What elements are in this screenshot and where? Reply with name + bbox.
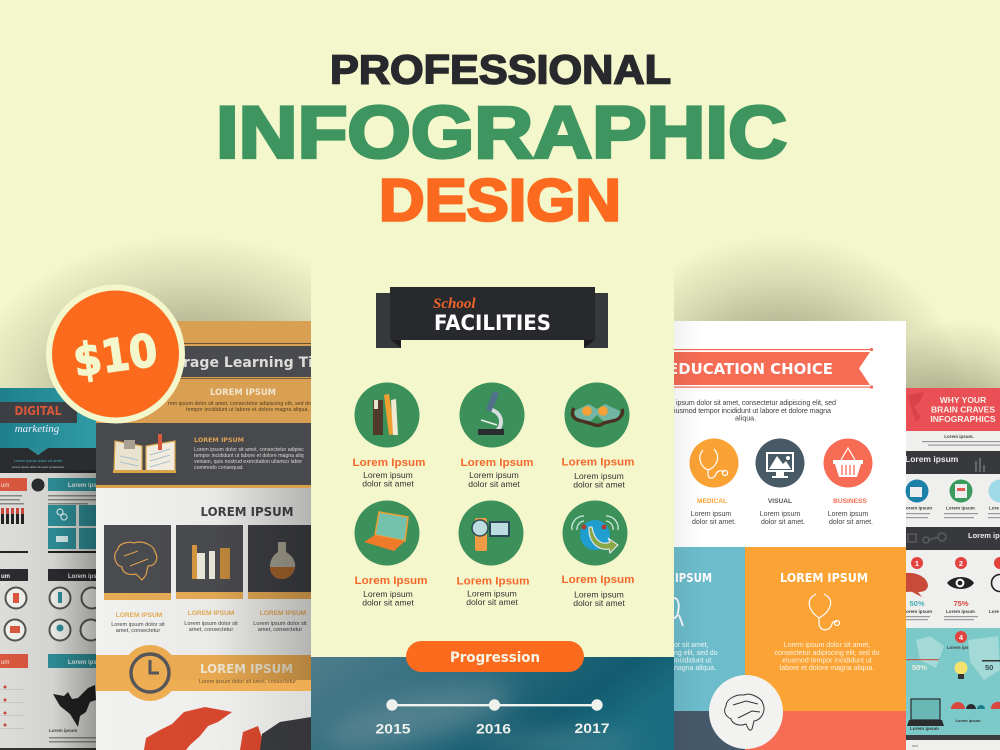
card captions: Lorem ipsum dolor sit <box>111 622 165 628</box>
icon: books <box>354 382 420 448</box>
icon row captions: Lorem ipsum <box>946 506 975 510</box>
facility labels: dolor sit amet <box>362 598 414 608</box>
panel: digital marketing (far left): um <box>1 660 9 666</box>
card captions: LOREM IPSUM <box>188 610 235 617</box>
icon: light bulb <box>954 662 968 679</box>
icon rings <box>4 588 102 640</box>
background shadow <box>0 235 1000 580</box>
orange block: Lorem ipsum dolor sit amet, <box>784 642 870 649</box>
stat captions <box>906 609 999 620</box>
blue block: incididunt ut <box>674 658 711 664</box>
card captions: LOREM IPSUM <box>260 610 307 617</box>
book row text: veniam, quis nostrud exercitation ullamco labor <box>194 459 302 465</box>
panel: why your brain craves infographics <box>905 388 1000 750</box>
card: books <box>176 525 243 599</box>
people row <box>1 508 24 514</box>
facility labels: dolor sit amet <box>466 597 518 607</box>
facility labels: dolor sit amet <box>573 480 625 490</box>
icon labels: dolor sit amet. <box>761 519 805 526</box>
teal header <box>0 388 96 448</box>
icon: laptop <box>354 500 420 566</box>
teal map block: 50% <box>912 663 927 672</box>
icon labels <box>691 498 873 526</box>
map blob <box>908 392 924 422</box>
panel: digital marketing (far left): um <box>1 574 10 580</box>
cart dot <box>32 478 44 492</box>
dark strip <box>0 448 96 473</box>
facility labels: Lorem Ipsum <box>460 457 534 469</box>
timeline: 2017 <box>574 720 610 736</box>
panel: average learning time: tempor incididunt ut labore et dolore magna aliqua. <box>186 407 309 413</box>
teal map block <box>906 628 1000 735</box>
timeline: 2016 <box>476 720 511 736</box>
panel: digital marketing (far left) <box>0 388 102 750</box>
header title: INFOGRAPHICS <box>930 414 996 424</box>
map silhouette <box>53 685 96 727</box>
world map <box>144 707 311 750</box>
bottom colour blocks <box>674 711 745 750</box>
price badge <box>46 284 185 424</box>
sky footer <box>311 657 674 750</box>
red header <box>906 388 1000 431</box>
right edge shade <box>0 470 96 750</box>
heading: professional infographic design <box>216 46 787 234</box>
digital heading: DIGITAL <box>14 404 62 418</box>
icon: laptop <box>907 699 944 726</box>
heading line: INFOGRAPHIC: INFOGRAPHIC <box>216 92 787 174</box>
orange clock band <box>96 655 311 691</box>
sky clouds <box>328 676 632 750</box>
panel: digital marketing (far left): um <box>1 483 9 489</box>
facility labels: Lorem ipsum <box>467 588 517 598</box>
facility labels: Lorem Ipsum <box>352 457 426 469</box>
stats: 75% <box>953 599 969 608</box>
stats <box>909 599 969 608</box>
icon labels: Lorem ipsum <box>828 511 868 518</box>
card: flask <box>248 525 311 599</box>
intro text: ipsum dolor sit amet, consectetur adipiscing elit, sed <box>676 398 836 407</box>
intro text: aliqua. <box>735 414 756 422</box>
facility labels: Lorem ipsum <box>574 590 624 600</box>
slider rows <box>0 689 24 729</box>
banner script: School <box>433 296 476 312</box>
numbered badges <box>911 557 1000 569</box>
dark band two <box>906 527 1000 550</box>
section heading: LOREM IPSUM <box>200 504 294 519</box>
dark band <box>906 451 1000 474</box>
icon: goggles <box>564 382 630 448</box>
heading line: DESIGN: DESIGN <box>379 168 621 234</box>
card captions: amet, consectetur <box>116 628 160 634</box>
stat captions: Lore <box>989 609 999 614</box>
orange top band <box>96 321 311 423</box>
panel: why your brain craves infographics: 30% <box>912 744 918 748</box>
facility labels: Lorem Ipsum <box>562 456 635 468</box>
intro text <box>674 398 836 422</box>
panel: digital marketing (far left): Lorem ipsum dolor sit amet <box>14 458 63 463</box>
red tab <box>0 478 27 491</box>
icon row <box>906 480 1000 502</box>
icon labels: MEDICAL <box>697 498 727 505</box>
dark book row <box>96 423 311 485</box>
numbered badges: 1 <box>915 559 919 568</box>
teal tab 2 <box>48 654 96 668</box>
card captions <box>111 610 307 634</box>
dark ribbon <box>0 402 77 423</box>
blue block: IPSUM <box>675 571 712 585</box>
icon: brain <box>906 573 928 597</box>
stats: 50% <box>909 599 925 608</box>
ribbon <box>668 348 873 389</box>
icon labels: VISUAL <box>768 498 792 505</box>
icon labels: dolor sit amet. <box>692 519 736 526</box>
dark band two title: Lorem ip <box>968 531 1000 540</box>
blue block: or sit amet, <box>674 642 709 649</box>
icon: clock <box>122 645 178 701</box>
facility labels: dolor sit amet <box>573 598 625 608</box>
panel: education choice <box>668 321 906 750</box>
icon: eye <box>947 577 974 589</box>
mini gauges <box>951 702 1000 709</box>
panel: digital marketing (far left): Lorem ips <box>68 574 97 580</box>
facility labels: dolor sit amet <box>362 478 414 488</box>
header title <box>930 395 996 424</box>
header title: BRAIN CRAVES <box>931 404 995 414</box>
facility labels <box>352 456 635 608</box>
dark band title: Lorem ipsum <box>905 454 959 464</box>
icon labels: BUSINESS <box>833 498 867 505</box>
separators <box>0 551 28 553</box>
timeline <box>376 699 610 736</box>
facility labels: Lorem ipsum <box>363 589 413 599</box>
numbered badges: 2 <box>959 559 963 568</box>
progression pill <box>406 641 584 672</box>
dark footer band <box>906 735 1000 740</box>
facility labels: Lorem Ipsum <box>562 574 635 586</box>
panel: average learning time <box>96 321 313 750</box>
card captions: amet, consectetur <box>258 627 302 633</box>
title banner <box>376 287 608 348</box>
intro text: iusmod tempor incididunt ut labore et dolore magna <box>674 406 831 415</box>
blue block: nagna aliqua. <box>674 665 716 672</box>
card captions: Lorem ipsum dolor sit <box>184 621 238 627</box>
icon: open book <box>113 434 176 473</box>
book row text <box>194 447 304 471</box>
text lines <box>0 495 96 504</box>
panel: digital marketing (far left): Lorem ips <box>68 660 97 666</box>
teal tab <box>48 478 96 491</box>
icon labels: Lorem ipsum <box>691 511 731 518</box>
progression pill: Progression <box>450 650 540 666</box>
icon: basket circle <box>824 438 872 488</box>
icon: stethoscope circle <box>690 438 738 488</box>
caption: Lorem ipsum <box>49 728 77 733</box>
stat captions: Lorem ipsum <box>946 609 975 614</box>
icon: globe network <box>562 500 628 566</box>
intro: Lorem ipsum. <box>944 434 974 439</box>
icon: microscope <box>460 382 524 448</box>
teal icon tiles <box>48 505 96 549</box>
card captions: Lorem ipsum dolor sit <box>253 621 307 627</box>
teal map block: Lorem ipsum <box>955 718 981 723</box>
icon labels: dolor sit amet. <box>829 519 873 526</box>
shade near centre panel <box>674 321 906 750</box>
price text: $10 <box>70 323 161 388</box>
facility labels: Lorem ipsum <box>469 470 519 480</box>
facility labels: Lorem ipsum <box>363 470 413 480</box>
panel: digital marketing (far left): Lorem ipsum dolor sit amet consectetur <box>12 465 64 469</box>
card captions: LOREM IPSUM <box>116 612 163 619</box>
icon row captions <box>906 506 1000 518</box>
panel: digital marketing (far left): Lorem ips <box>68 483 97 489</box>
blue block: ng elit, sed do <box>674 650 718 657</box>
teal map block: Lorem ipsum <box>910 726 939 731</box>
ribbon title: EDUCATION CHOICE <box>668 360 833 378</box>
subheading: LOREM IPSUM <box>210 388 276 398</box>
icon: monitor circle <box>756 438 804 488</box>
card captions: amet, consectetur <box>189 627 233 633</box>
dark tabs <box>0 569 28 581</box>
blue block <box>674 547 745 711</box>
banner title: FACILITIES <box>434 311 551 336</box>
teal map block: Lorem ipsum <box>947 645 975 650</box>
icon: brain disc <box>709 675 783 749</box>
stat captions: orem ipsum <box>906 609 932 614</box>
band heading: LOREM IPSUM <box>200 661 293 676</box>
marketing script: marketing <box>15 423 60 435</box>
facility labels: Lorem Ipsum <box>354 575 428 587</box>
header title: WHY YOUR <box>940 395 986 405</box>
timeline: 2015 <box>376 720 411 736</box>
orange block <box>745 547 906 711</box>
teal map block: 50 <box>985 663 993 672</box>
book row heading: LOREM IPSUM <box>194 437 244 444</box>
card: brain <box>104 525 171 600</box>
icon: camcorder <box>458 500 524 566</box>
book row text: Lorem ipsum dolor sit amet, consectetur adipisc <box>194 447 304 453</box>
icon: ring <box>992 574 1000 592</box>
orange block: labore et dolore magna aliqua. <box>780 665 874 672</box>
icon labels: Lorem ipsum <box>760 511 800 518</box>
facility labels: dolor sit amet <box>468 479 520 489</box>
teal map block: 4 <box>959 633 964 642</box>
facility labels: Lorem ipsum <box>574 471 624 481</box>
panel right shade <box>96 488 311 680</box>
heading line: PROFESSIONAL: PROFESSIONAL <box>330 46 671 92</box>
book row text: commodo consequat. <box>194 465 244 471</box>
orange block: consectetur adipiscing elit, sed do <box>774 650 880 657</box>
orange block: LOREM IPSUM <box>780 571 868 585</box>
icon row captions: orem ipsum <box>906 506 932 510</box>
icon row captions: Lore <box>989 506 999 510</box>
band text: Lorem ipsum dolor sit amet, consectetur <box>199 679 296 685</box>
book row text: tempor incididunt ut labore et dolore magna aliq <box>194 453 304 459</box>
red tab 2 <box>0 654 28 668</box>
subheading text: rem ipsum dolor sit amet, consectetur adipiscing elit, sed do <box>168 401 311 407</box>
panel title: rage Learning Ti <box>183 355 313 371</box>
panel: school facilities (centre) <box>311 253 674 750</box>
orange block: eiusmod tempor incididunt ut <box>782 658 872 664</box>
dark title band <box>96 346 311 377</box>
facility labels: Lorem Ipsum <box>456 576 530 588</box>
